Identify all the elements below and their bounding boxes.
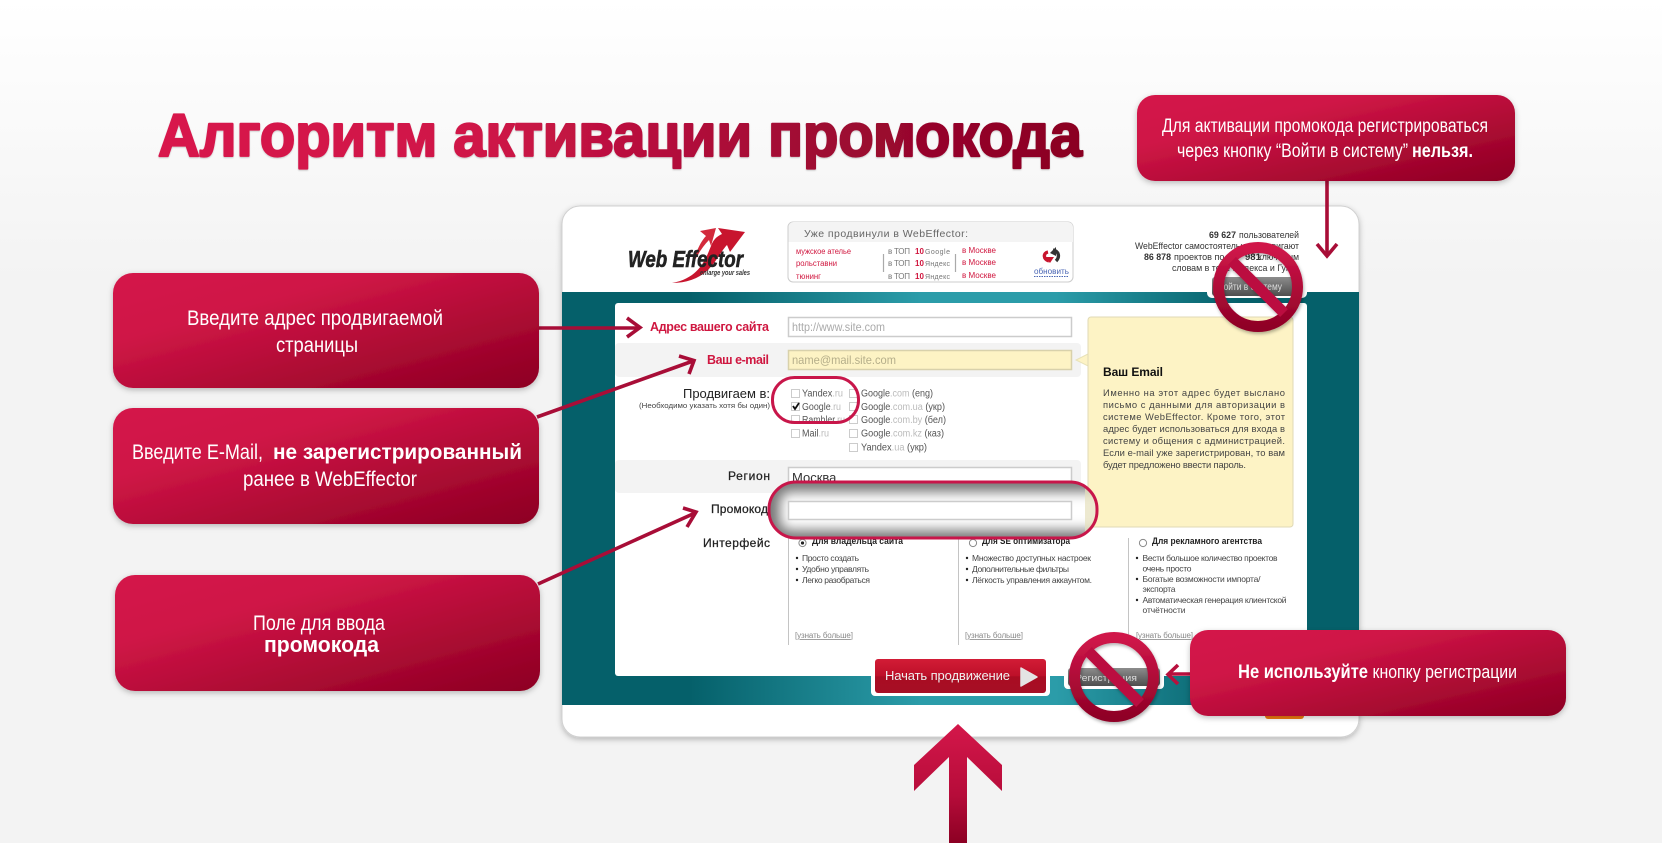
callout: email: не зарегистрированный xyxy=(273,441,522,464)
column: site owner: Легко разобраться xyxy=(802,575,870,585)
white form area xyxy=(615,303,1307,676)
form: promo code row: Интерфейс xyxy=(703,536,770,550)
login button notch xyxy=(1207,280,1307,298)
user stats: словам в топе Яндекса и Гугла xyxy=(1172,263,1300,274)
form: promo code row xyxy=(703,502,770,550)
column: ad agency: Автоматическая генерация клиентской xyxy=(1142,595,1287,605)
title: Алгоритм активации промокода xyxy=(158,102,1083,169)
ticker box: в ТОП xyxy=(888,247,910,256)
column: ad agency: Для рекламного агентства xyxy=(1152,536,1263,547)
callout: registration warning: Не используйте xyxy=(1238,662,1368,683)
column: SE optimizer: Дополнительные фильтры xyxy=(972,564,1069,574)
column: ad agency: [узнать больше] xyxy=(1136,631,1193,640)
column: SE optimizer xyxy=(965,536,1092,640)
callout: email: Введите E-Mail, xyxy=(132,441,263,464)
callout: address: страницы xyxy=(276,334,358,357)
column: ad agency: экспорта xyxy=(1142,584,1176,594)
form: search engines: Yandex.ru xyxy=(802,388,843,400)
callout: login warning: Для активации промокода регистрироваться xyxy=(1162,116,1488,137)
arrow: email xyxy=(537,356,694,417)
callout: login warning: нельзя. xyxy=(1412,141,1473,162)
user stats: 69 627 xyxy=(1209,230,1236,241)
yellow hint box: будет предложено ввести пароль. xyxy=(1103,459,1246,470)
arrow: login warning xyxy=(1317,181,1337,256)
form: site address row: http://www.site.com xyxy=(792,320,885,334)
logo: WebEffector: enlarge your sales xyxy=(700,268,750,277)
orange tab xyxy=(1265,700,1304,719)
form: site address row xyxy=(650,318,1072,336)
callout: registration warning xyxy=(1190,630,1566,716)
logo: WebEffector: Web Effector xyxy=(628,246,744,272)
oval: search engine highlight xyxy=(772,378,858,422)
ticker box: Уже продвинули в WebEffector: xyxy=(804,228,968,240)
ticker box: 10 xyxy=(915,272,924,281)
column: ad agency: отчётности xyxy=(1142,605,1186,615)
arrow: address xyxy=(539,318,640,337)
column: SE optimizer: [узнать больше] xyxy=(965,631,1023,640)
arrow: registration warning xyxy=(1168,665,1192,684)
start button xyxy=(871,655,1050,696)
user stats: 86 878 xyxy=(1144,252,1171,263)
column: site owner: [узнать больше] xyxy=(795,631,853,640)
ticker box: Яндекс xyxy=(925,261,950,268)
yellow hint box xyxy=(1088,317,1293,527)
arrow: promo code xyxy=(538,508,696,584)
oval: promo code highlight xyxy=(769,482,1110,538)
form: email row: Ваш e-mail xyxy=(707,353,769,367)
ticker box: в Москве xyxy=(962,271,997,280)
column: ad agency xyxy=(1136,536,1287,640)
column: site owner xyxy=(795,536,904,640)
form: search engines: Продвигаем в: xyxy=(683,386,770,401)
user stats: 981 xyxy=(1245,252,1262,263)
callout: email xyxy=(113,408,539,524)
form: promo code row: Промокод xyxy=(711,502,768,516)
interface columns xyxy=(788,536,1287,645)
form: region row: Регион xyxy=(728,469,770,483)
column: site owner: Для владельца сайта xyxy=(812,536,904,547)
callout: registration warning: кнопку регистрации xyxy=(1372,662,1517,682)
column: ad agency: Вести большое количество проектов xyxy=(1142,553,1278,563)
ticker box: мужское ателье xyxy=(796,247,852,256)
yellow hint box: системе WebEffector. Кроме того, этот xyxy=(1103,411,1286,422)
form: search engines: Google.ru xyxy=(802,402,841,413)
form: region row xyxy=(615,460,1081,493)
logo: WebEffector xyxy=(628,228,750,283)
ticker box: обновить xyxy=(1034,266,1070,276)
ticker box: в ТОП xyxy=(888,259,910,268)
form: search engines: (Необходимо указать хотя бы один) xyxy=(639,401,771,410)
yellow hint box: Именно на этот адрес будет выслано xyxy=(1103,387,1285,398)
form: search engines: Google.com.ua (укр) xyxy=(861,402,945,413)
callout: address xyxy=(113,273,539,388)
form: search engines: Google.com (eng) xyxy=(861,388,933,400)
icon: refresh xyxy=(1044,247,1058,263)
column: SE optimizer: Для SE оптимизатора xyxy=(982,536,1071,547)
form: search engines: Google.com.kz (каз) xyxy=(861,428,944,440)
column: ad agency: Богатые возможности импорта/ xyxy=(1142,574,1261,584)
form: search engines: Rambler.ru xyxy=(802,415,845,426)
start button: Начать продвижение xyxy=(885,668,1010,683)
icon: prohibition sign over login xyxy=(1218,248,1298,326)
login button xyxy=(1212,277,1297,296)
ticker box: рольставни xyxy=(796,259,837,268)
icon: prohibition sign over registration xyxy=(1074,638,1154,716)
form: search engines: Google.com.by (бел) xyxy=(861,414,946,426)
user stats: пользователей xyxy=(1239,230,1299,241)
callout: login warning: через кнопку “Войти в систему” xyxy=(1177,141,1408,162)
user stats: ключевым xyxy=(1258,252,1299,263)
arrow: big up xyxy=(914,724,1002,843)
ticker box: 10 xyxy=(915,247,924,256)
ticker box: 10 xyxy=(915,259,924,268)
ticker box: Яндекс xyxy=(925,274,950,281)
column: SE optimizer: Лёгкость управления аккаунтом. xyxy=(972,575,1092,585)
yellow hint box: Ваш Email xyxy=(1103,365,1163,379)
ticker box: в Москве xyxy=(962,258,997,267)
form: search engines xyxy=(639,386,946,454)
user stats: проектов по 3 xyxy=(1174,252,1232,263)
ticker box: Google xyxy=(925,249,950,256)
column: SE optimizer: Множество доступных настроек xyxy=(972,553,1091,563)
card xyxy=(562,206,1359,737)
column: site owner: Удобно управлять xyxy=(802,564,870,574)
panel: site screenshot xyxy=(562,206,1359,737)
callout: promo code xyxy=(115,575,540,691)
ticker box: в ТОП xyxy=(888,272,910,281)
yellow hint box: письмо с данными для авторизации в xyxy=(1103,399,1285,410)
callout: login warning xyxy=(1137,95,1515,181)
callout: promo code: промокода xyxy=(264,632,380,657)
login button: Войти в систему xyxy=(1218,282,1282,293)
ticker box: тюнинг xyxy=(796,272,821,281)
callout: email: ранее в WebEffector xyxy=(243,468,417,491)
form: email row: name@mail.site.com xyxy=(792,353,896,367)
callout: promo code: Поле для ввода xyxy=(253,612,385,635)
yellow hint box: адрес будет использоваться для входа в xyxy=(1103,423,1285,434)
register button xyxy=(1064,660,1164,689)
user stats xyxy=(1135,230,1300,274)
callout: address: Введите адрес продвигаемой xyxy=(187,307,443,330)
form: search engines: Yandex.ua (укр) xyxy=(861,442,927,454)
user stats: WebEffector самостоятельно продвигают xyxy=(1135,241,1300,252)
column: ad agency: очень просто xyxy=(1142,564,1192,574)
form: email row xyxy=(615,343,1088,377)
ticker box xyxy=(788,222,1073,282)
form: search engines: Mail.ru xyxy=(802,428,829,440)
column: site owner: Просто создать xyxy=(802,553,860,563)
yellow hint box: Если e-mail уже зарегистрирован, то вам xyxy=(1103,447,1285,458)
form: site address row: Адрес вашего сайта xyxy=(650,320,770,334)
teal band xyxy=(562,292,1359,705)
register button: Регистрация xyxy=(1075,673,1137,684)
yellow hint box: систему и общения с администрацией. xyxy=(1103,435,1285,446)
form: region row: Москва xyxy=(792,470,837,485)
ticker box: в Москве xyxy=(962,246,997,255)
